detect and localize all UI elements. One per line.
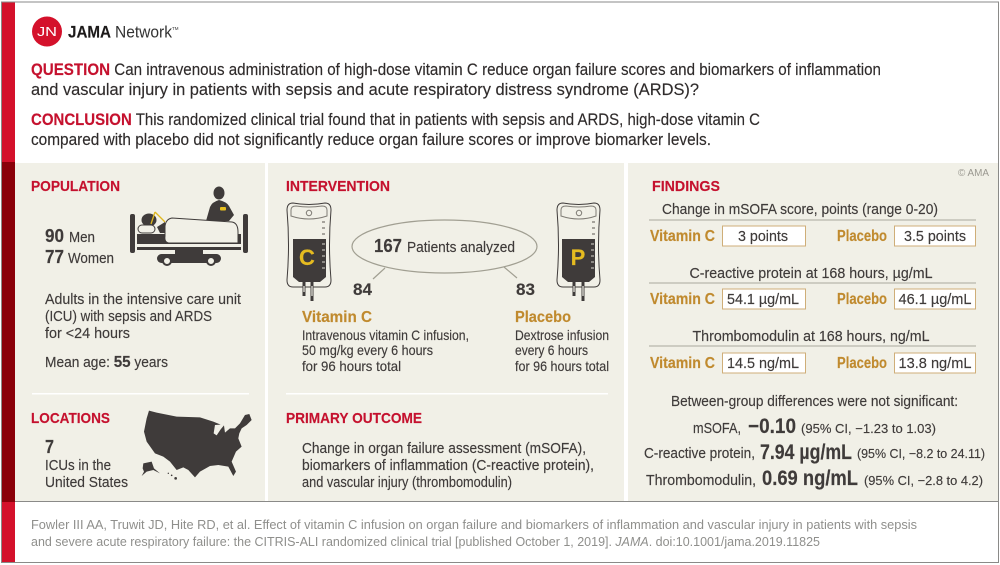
row: mSOFA: 3 points [738, 229, 788, 245]
icon: placebo IV bag [557, 203, 600, 301]
text: primary outcome description: and vascular injury (thrombomodulin) [302, 475, 512, 491]
red side bar [2, 2, 15, 562]
icon: patient in hospital bed with clinician [130, 186, 248, 265]
text: between-group differences: (95% CI, −8.2 to 24.11) [857, 446, 985, 461]
text: adults description: for <24 hours [45, 326, 130, 342]
text: adults description: Adults in the intensive care unit [45, 292, 241, 308]
conclusion text: compared with placebo did not significantly reduce organ failure scores or improve biomarker levels. [31, 131, 711, 149]
row: thrombomodulin: Vitamin C [650, 355, 715, 372]
text: ICU count [45, 437, 128, 491]
text: between-group differences: Thrombomodulin, [646, 473, 756, 489]
question text [31, 61, 881, 99]
heading: population: POPULATION [31, 178, 120, 195]
text: between-group differences: −0.10 [748, 415, 796, 438]
text: ICU count: ICUs in the [45, 458, 111, 474]
column: placebo arm: Dextrose infusion [515, 327, 609, 343]
ellipse: patients analyzed: Patients analyzed [407, 240, 515, 256]
citation: Fowler III AA, Truwit JD, Hite RD, et al. Effect of vitamin C infusion on organ failure and biomarkers of inflammation and vascular injury in patients with sepsis [31, 517, 917, 532]
divider [32, 393, 249, 394]
column: vitamin C arm: 50 mg/kg every 6 hours [302, 342, 433, 358]
ellipse: patients analyzed [352, 220, 537, 273]
conclusion text [31, 111, 760, 149]
heading: findings: FINDINGS [652, 178, 720, 195]
row: mSOFA: 3.5 points [904, 229, 966, 245]
heading: primary outcome: PRIMARY OUTCOME [286, 410, 422, 427]
stats: men and women: Women [68, 251, 114, 267]
row: C-reactive protein: 46.1 µg/mL [898, 292, 972, 308]
icon: placebo IV bag: P [571, 245, 585, 270]
text: between-group differences: (95% CI, −2.8 to 4.2) [864, 473, 983, 488]
text: between-group differences: mSOFA, [693, 421, 741, 437]
question text: QUESTION Can intravenous administration of high-dose vitamin C reduce organ failure scores and biomarkers of inflammation [31, 61, 881, 79]
row: C-reactive protein: 54.1 µg/mL [727, 292, 799, 308]
logo: JAMA Network: JAMA [68, 22, 111, 42]
text: primary outcome description: biomarkers of inflammation (C-reactive protein), [302, 458, 594, 474]
row: thrombomodulin: Placebo [837, 355, 887, 372]
text: between-group differences: C-reactive protein, [644, 446, 755, 462]
row: mSOFA: Change in mSOFA score, points (range 0-20) [662, 202, 938, 218]
citation: and severe acute respiratory failure: the CITRIS-ALI randomized clinical trial [published October 1, 2019]. JAMA. doi:10.1001/jama.2019.11825 [31, 534, 820, 549]
text: primary outcome description [302, 441, 594, 491]
icon: vitamin C IV bag: C [299, 245, 315, 270]
column: placebo arm: Placebo [515, 309, 571, 326]
row: mSOFA: Vitamin C [650, 228, 715, 245]
panel: findings [628, 163, 998, 501]
column: vitamin C arm: Intravenous vitamin C infusion, [302, 327, 469, 343]
arrow: split to placebo [504, 267, 517, 278]
heading: intervention: INTERVENTION [286, 178, 390, 195]
number: 84: 84 [353, 280, 373, 299]
stats: men and women: 90 [45, 226, 64, 246]
text: adults description [45, 292, 241, 342]
row: thrombomodulin [649, 329, 976, 373]
row: C-reactive protein [649, 266, 976, 309]
row: C-reactive protein: Placebo [837, 291, 887, 308]
column: vitamin C arm: for 96 hours total [302, 358, 401, 374]
row: C-reactive protein: Vitamin C [650, 291, 715, 308]
row: thrombomodulin: 13.8 ng/mL [898, 356, 972, 372]
ellipse: patients analyzed: 167 [374, 236, 402, 256]
row: thrombomodulin: 14.5 ng/mL [727, 356, 799, 372]
row: mSOFA [649, 202, 976, 246]
text: primary outcome description: Change in organ failure assessment (mSOFA), [302, 441, 586, 457]
logo: JAMA Network: JN [37, 24, 57, 39]
stats: men and women [45, 226, 114, 267]
question text: and vascular injury in patients with sepsis and acute respiratory distress syndrome (ARDS)? [31, 81, 699, 99]
text: between-group differences: 7.94 µg/mL [760, 441, 852, 464]
column: placebo arm: for 96 hours total [515, 358, 609, 374]
text: between-group differences: 0.69 ng/mL [762, 467, 858, 490]
logo: JAMA Network [32, 16, 179, 46]
column: placebo arm: every 6 hours [515, 342, 588, 358]
column: vitamin C arm [302, 309, 469, 374]
panel: population and locations [15, 163, 265, 501]
number: 83: 83 [516, 280, 535, 299]
row: mSOFA: Placebo [837, 228, 887, 245]
icon: map of the United States [142, 411, 252, 480]
text: between-group differences [644, 394, 985, 490]
divider [286, 393, 608, 394]
icon: vitamin C IV bag [287, 203, 331, 301]
row: thrombomodulin: Thrombomodulin at 168 hours, ng/mL [692, 329, 930, 345]
stats: men and women: Men [69, 230, 95, 246]
column: placebo arm [515, 309, 609, 374]
conclusion text: CONCLUSION This randomized clinical trial found that in patients with sepsis and ARDS, high-dose vitamin C [31, 111, 760, 129]
text: adults description: (ICU) with sepsis and ARDS [45, 309, 212, 325]
text: ICU count: 7 [45, 437, 54, 457]
text: between-group differences: Between-group differences were not significant: [671, 394, 958, 410]
logo: JAMA Network: Network [115, 22, 172, 42]
text: mean age: Mean age: 55 years [45, 354, 168, 371]
heading: locations: LOCATIONS [31, 410, 110, 427]
copyright: © AMA [958, 167, 989, 179]
arrow: split to vitamin C [373, 268, 385, 279]
stats: men and women: 77 [45, 247, 64, 267]
text: between-group differences: (95% CI, −1.23 to 1.03) [801, 421, 936, 436]
row: C-reactive protein: C-reactive protein at 168 hours, µg/mL [690, 266, 932, 282]
logo: JAMA Network: TM [172, 26, 179, 31]
panel: intervention and primary outcome [268, 163, 624, 501]
citation [31, 517, 917, 549]
text: ICU count: United States [45, 475, 128, 491]
column: vitamin C arm: Vitamin C [302, 309, 372, 326]
